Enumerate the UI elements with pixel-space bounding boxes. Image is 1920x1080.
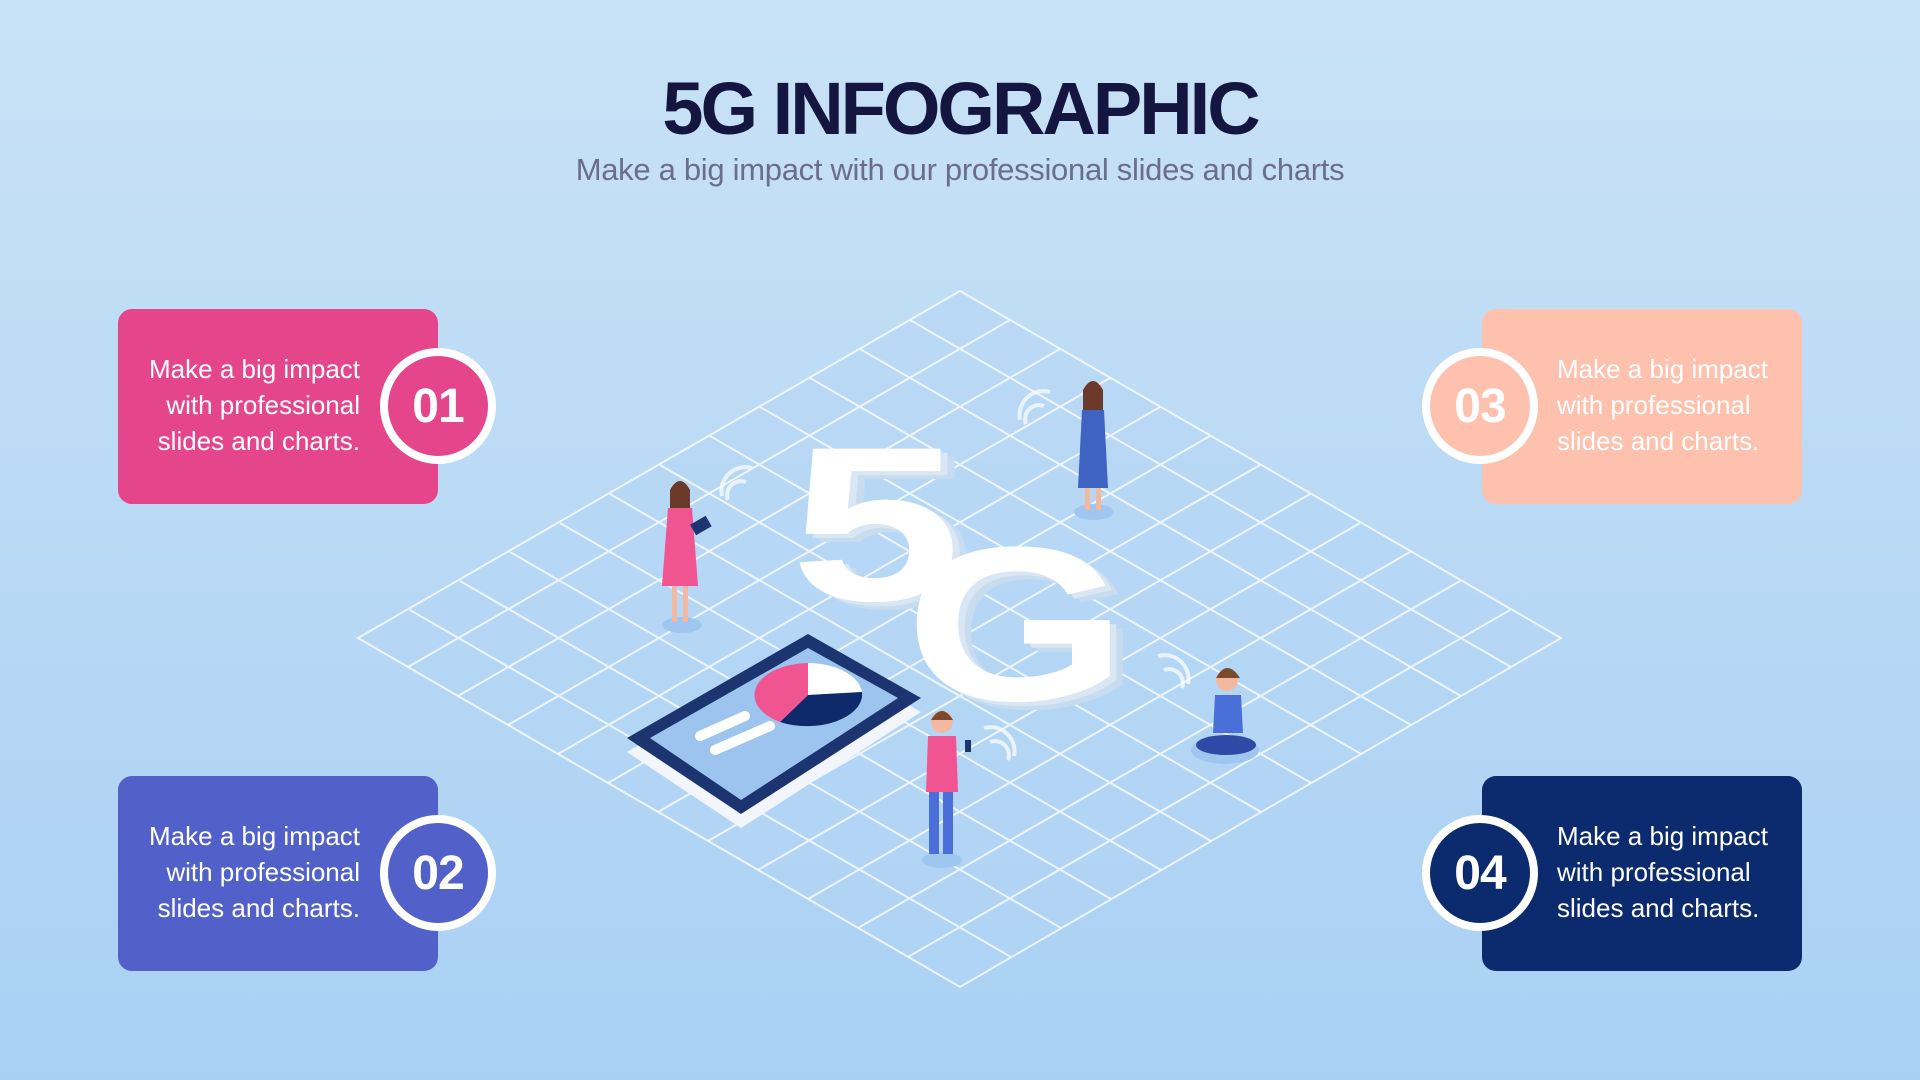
5G letters — [790, 401, 1140, 755]
badge 04: 04 — [1454, 846, 1506, 900]
panel: 02 — [118, 776, 438, 971]
badge 02 — [380, 815, 496, 931]
person: woman with tablet — [662, 481, 712, 633]
badge 04 — [1422, 815, 1538, 931]
5G letters: 5 — [790, 401, 961, 647]
badge 01: 01 — [412, 380, 464, 432]
person: man standing — [922, 711, 971, 868]
subtitle: Make a big impact with our professional slides and charts — [576, 152, 1344, 187]
panel: 01 — [118, 309, 438, 504]
panel: 02: Make a big impact with professional slides and charts. — [149, 821, 360, 923]
badge 03 — [1422, 348, 1538, 464]
badge 02: 02 — [412, 846, 464, 900]
wifi icons — [721, 391, 1189, 760]
person: man sitting — [1191, 668, 1259, 764]
5G letters: 5 — [797, 405, 968, 651]
phone — [627, 634, 921, 828]
panel: 04 — [1482, 776, 1802, 971]
panel: 01: Make a big impact with professional slides and charts. — [149, 354, 360, 456]
title: 5G INFOGRAPHIC — [662, 67, 1258, 150]
5G letters: G — [918, 510, 1140, 755]
grid floor — [358, 291, 1561, 987]
5G letters: G — [911, 506, 1134, 751]
panel: 03: Make a big impact with professional slides and charts. — [1557, 354, 1768, 456]
5G letters: 5 — [804, 409, 975, 655]
badge 03: 03 — [1454, 380, 1506, 432]
panel: 03 — [1482, 309, 1802, 504]
badge 01 — [380, 348, 496, 464]
panel: 04: Make a big impact with professional slides and charts. — [1557, 821, 1768, 923]
person: woman with phone — [1074, 381, 1114, 520]
5G letters: G — [905, 502, 1127, 747]
